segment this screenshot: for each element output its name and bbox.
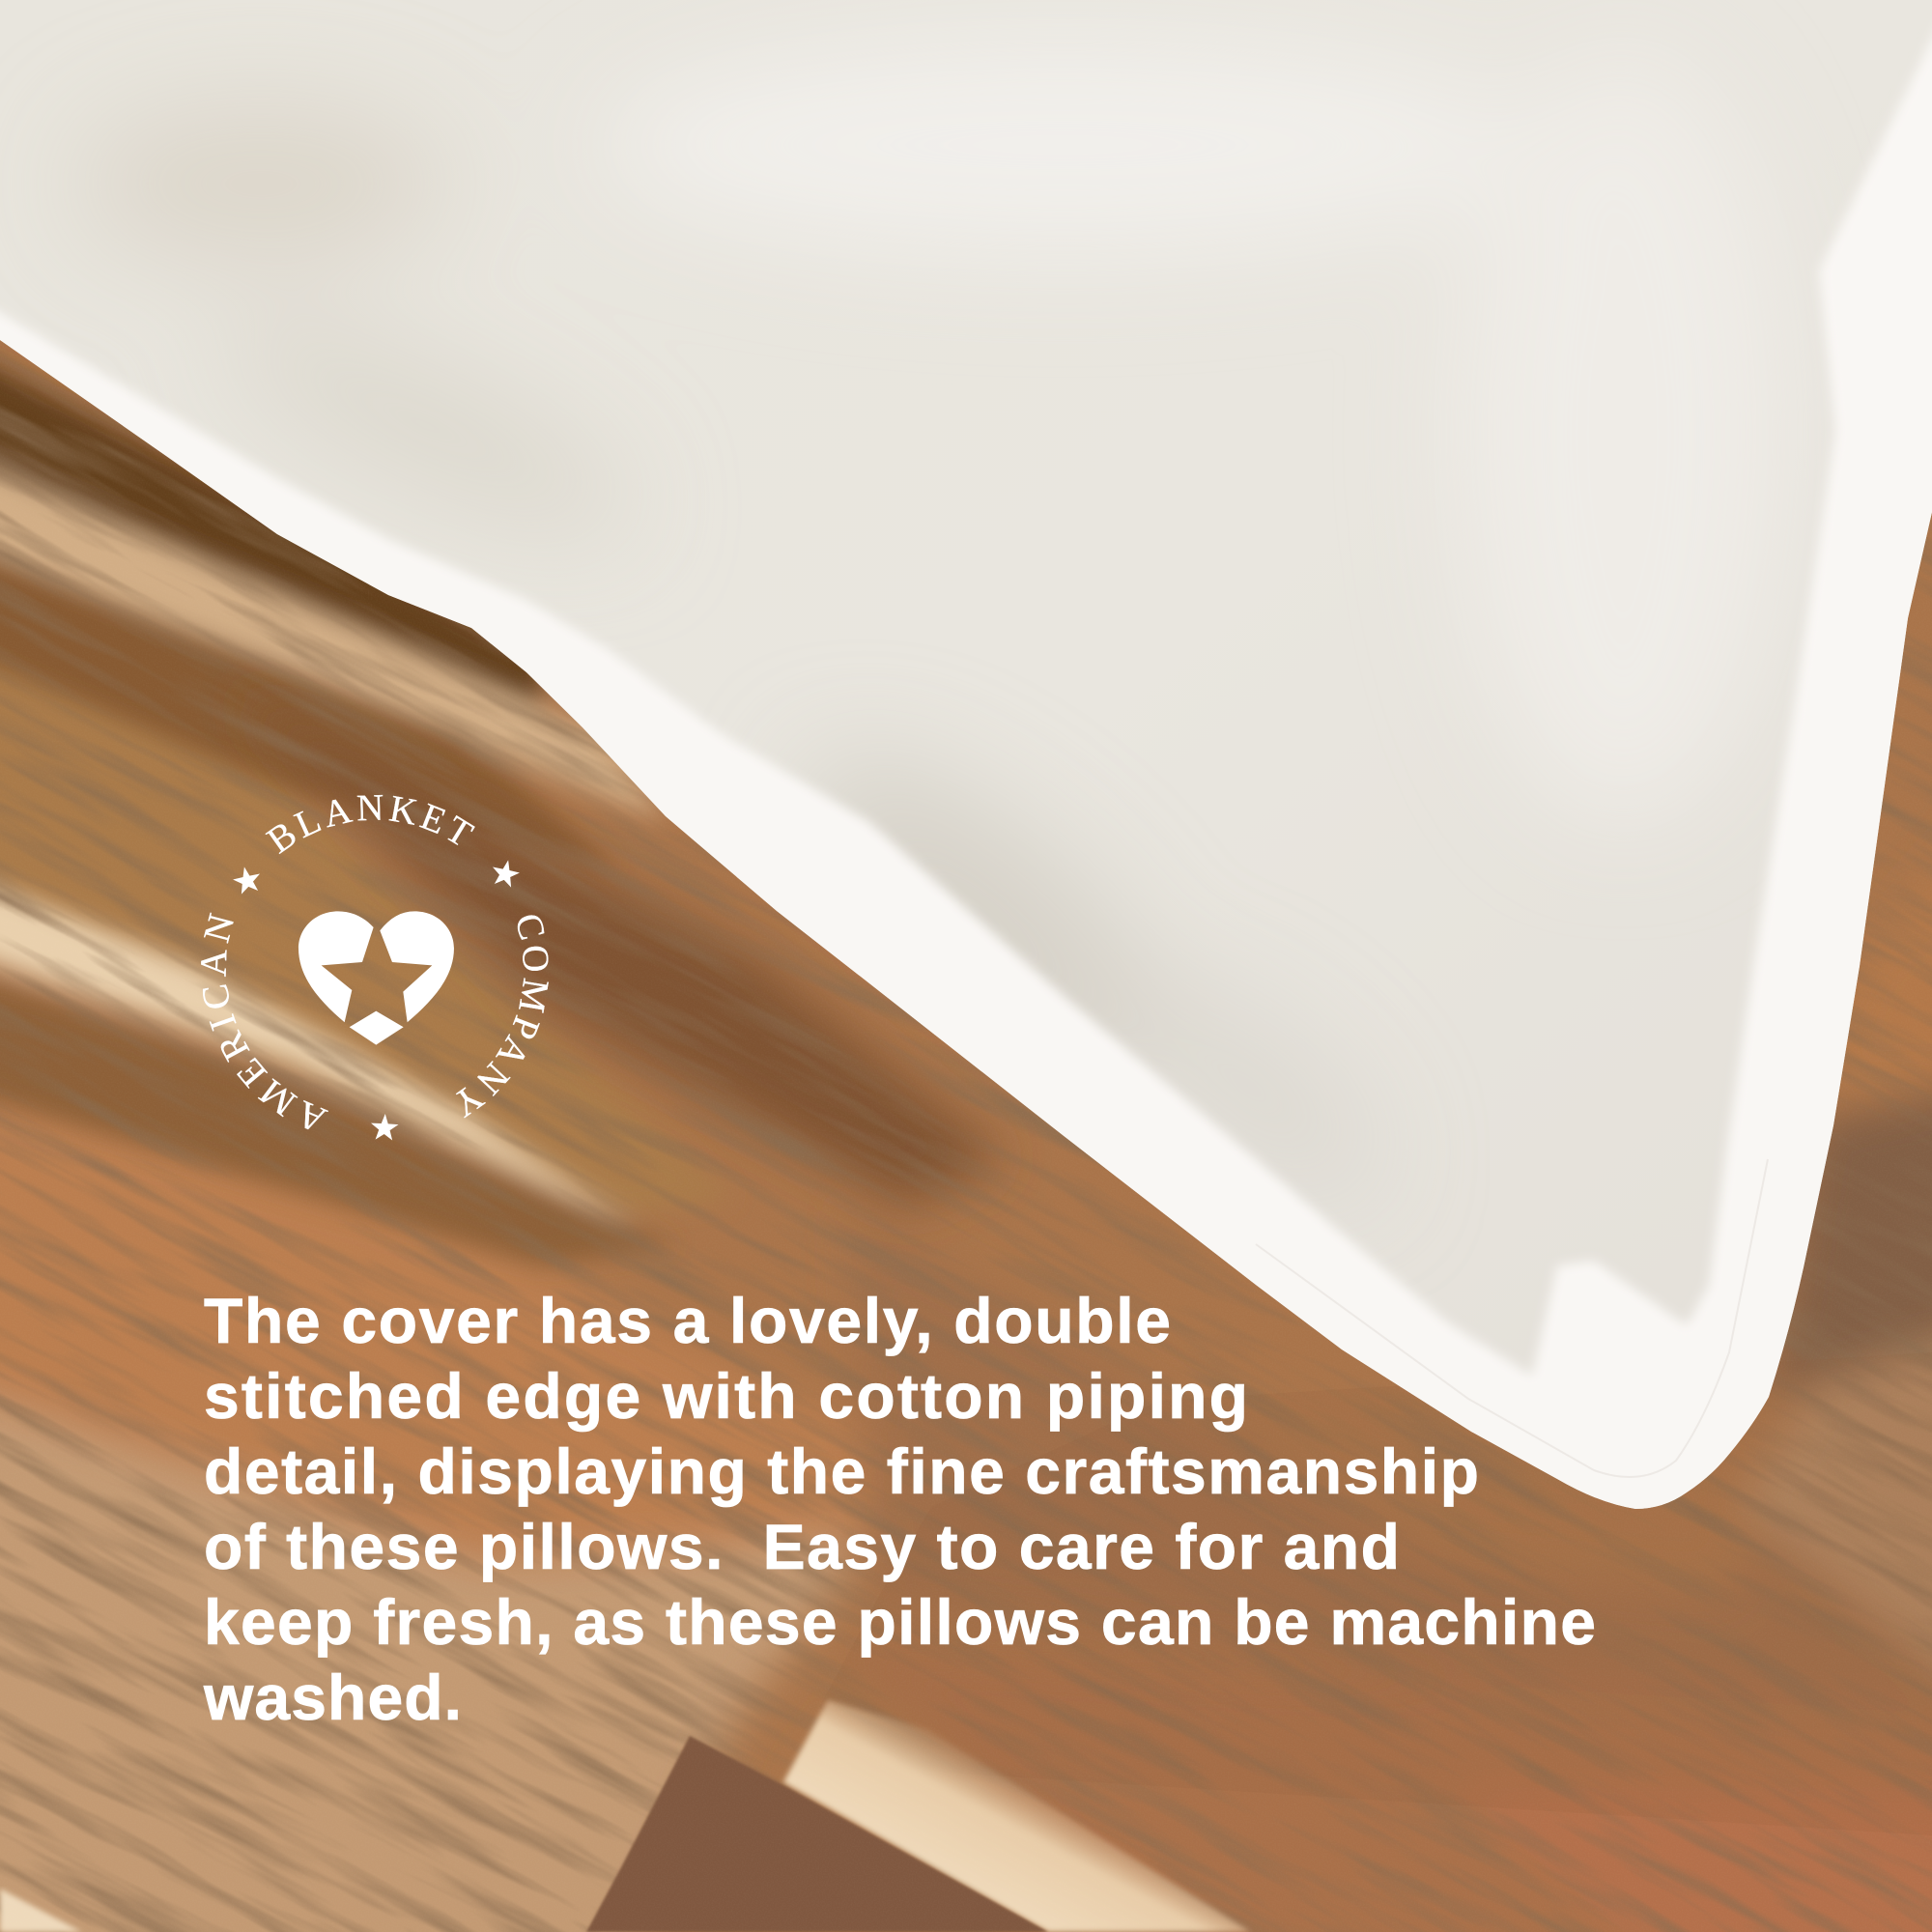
- body text: The cover has a lovely, double: [204, 1285, 1171, 1356]
- dark walnut block: [586, 1736, 1048, 1932]
- pillow fabric with shading: [0, 0, 1932, 1546]
- circular text: american: AMERICAN: [201, 912, 328, 1130]
- circular text: BLANKET: [265, 794, 475, 854]
- body text: washed.: [203, 1662, 462, 1733]
- icon: heart with star cut-out: [298, 911, 454, 1045]
- body text: detail, displaying the fine craftsmanship: [204, 1435, 1479, 1507]
- logo badge: American Blanket Company: [201, 794, 549, 1140]
- double-stitched seam: [1256, 1159, 1768, 1477]
- body text: of these pillows. Easy to care for and: [204, 1511, 1400, 1582]
- body text: stitched edge with cotton piping: [204, 1360, 1248, 1432]
- wood block seam: [819, 1352, 1932, 1835]
- cream sapwood corner: [0, 1889, 82, 1932]
- body text: keep fresh, as these pillows can be machine: [204, 1586, 1596, 1658]
- cream sapwood wedge: [783, 1700, 1251, 1932]
- circular text: company: COMPANY: [456, 915, 549, 1119]
- icon: star right: [489, 857, 522, 889]
- body text: [203, 1285, 1596, 1733]
- icon: star bottom: [370, 1113, 399, 1141]
- icon: star left: [231, 864, 264, 895]
